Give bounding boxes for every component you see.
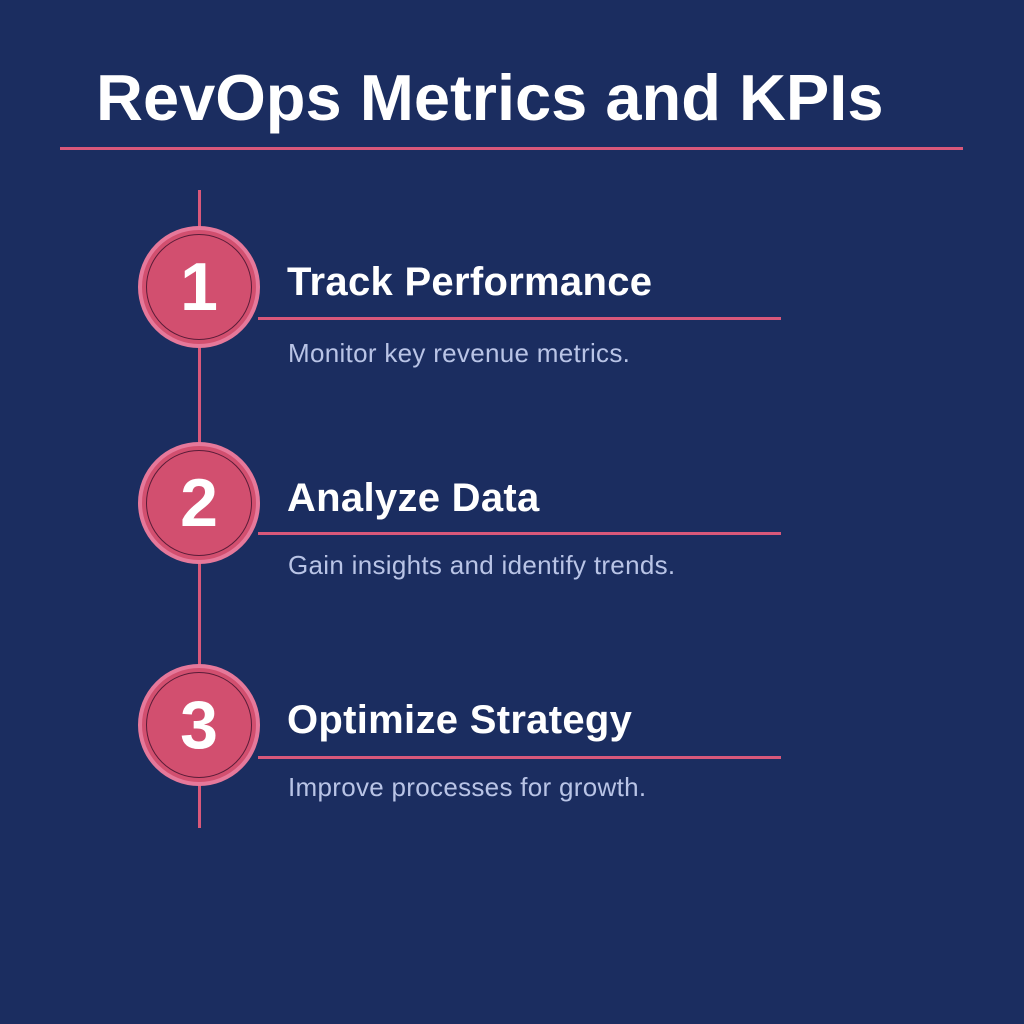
heading 1: Track Performance <box>287 260 652 304</box>
text 3: Improve processes for growth. <box>288 772 646 802</box>
timeline line <box>198 190 201 828</box>
title: RevOps Metrics and KPIs <box>96 61 884 134</box>
badge 2: 2 <box>180 465 218 541</box>
heading 2: Analyze Data <box>287 476 540 520</box>
badge 1: 1 <box>180 249 218 325</box>
badge 3 <box>138 664 260 786</box>
badge 1 <box>138 226 260 348</box>
text 1: Monitor key revenue metrics. <box>288 338 630 368</box>
text 2: Gain insights and identify trends. <box>288 550 675 580</box>
badge 3: 3 <box>180 687 218 763</box>
heading 3: Optimize Strategy <box>287 698 632 742</box>
badge 2 <box>138 442 260 564</box>
